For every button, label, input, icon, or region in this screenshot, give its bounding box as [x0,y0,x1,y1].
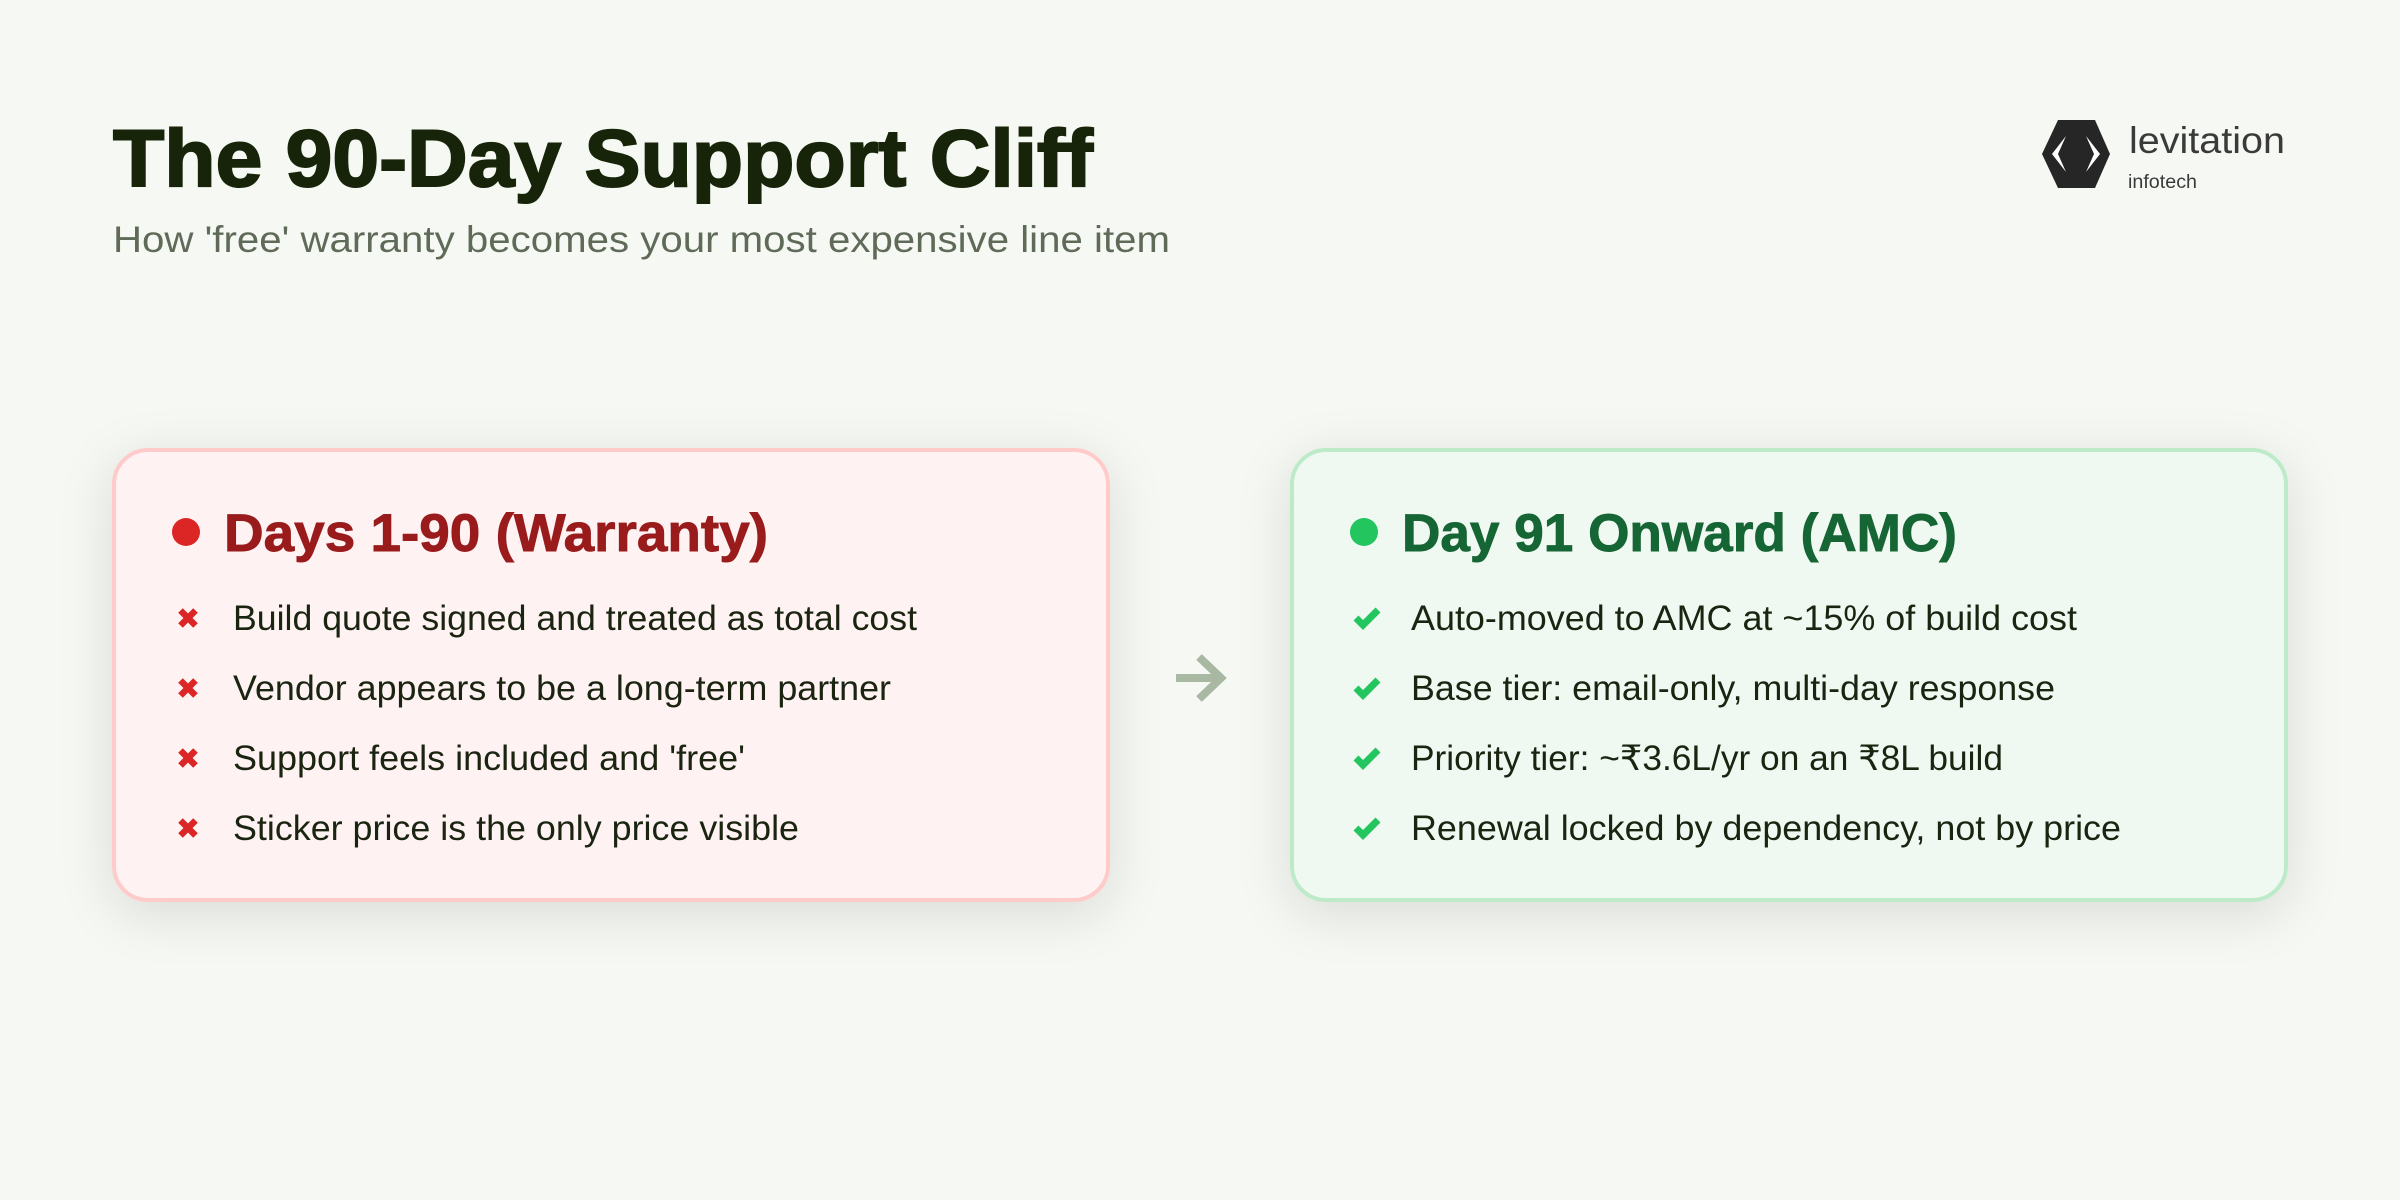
heading: amc: Day 91 Onward (AMC) [1402,504,1957,563]
list item 2: Base tier: email-only, multi-day response [1411,669,2055,708]
panel background [114,450,1108,900]
icon: hexagon logo mark [2042,120,2110,188]
arrow [1176,657,1221,699]
panel background [1292,450,2286,900]
panel: days 1-90 warranty [114,450,1108,900]
list item 4: Renewal locked by dependency, not by price [1411,809,2121,848]
logo sub-wordmark: infotech [2128,172,2197,193]
title: The 90-Day Support Cliff [113,114,1094,204]
logo wordmark: levitation [2129,120,2285,161]
heading: warranty: Days 1-90 (Warranty) [224,504,768,563]
list item 3: Support feels included and 'free' [233,739,745,778]
logo: levitation infotech [2042,120,2285,193]
panel: day 91 onward amc [1292,450,2286,900]
list item 1: Auto-moved to AMC at ~15% of build cost [1411,599,2077,638]
list item 1: Build quote signed and treated as total cost [233,599,917,638]
status dot: red [172,518,200,546]
list item 2: Vendor appears to be a long-term partner [233,669,891,708]
list item 3: Priority tier: ~₹3.6L/yr on an ₹8L build [1411,739,2003,778]
list item 4: Sticker price is the only price visible [233,809,799,848]
subtitle: How 'free' warranty becomes your most expensive line item [113,219,1170,260]
status dot: green [1350,518,1378,546]
